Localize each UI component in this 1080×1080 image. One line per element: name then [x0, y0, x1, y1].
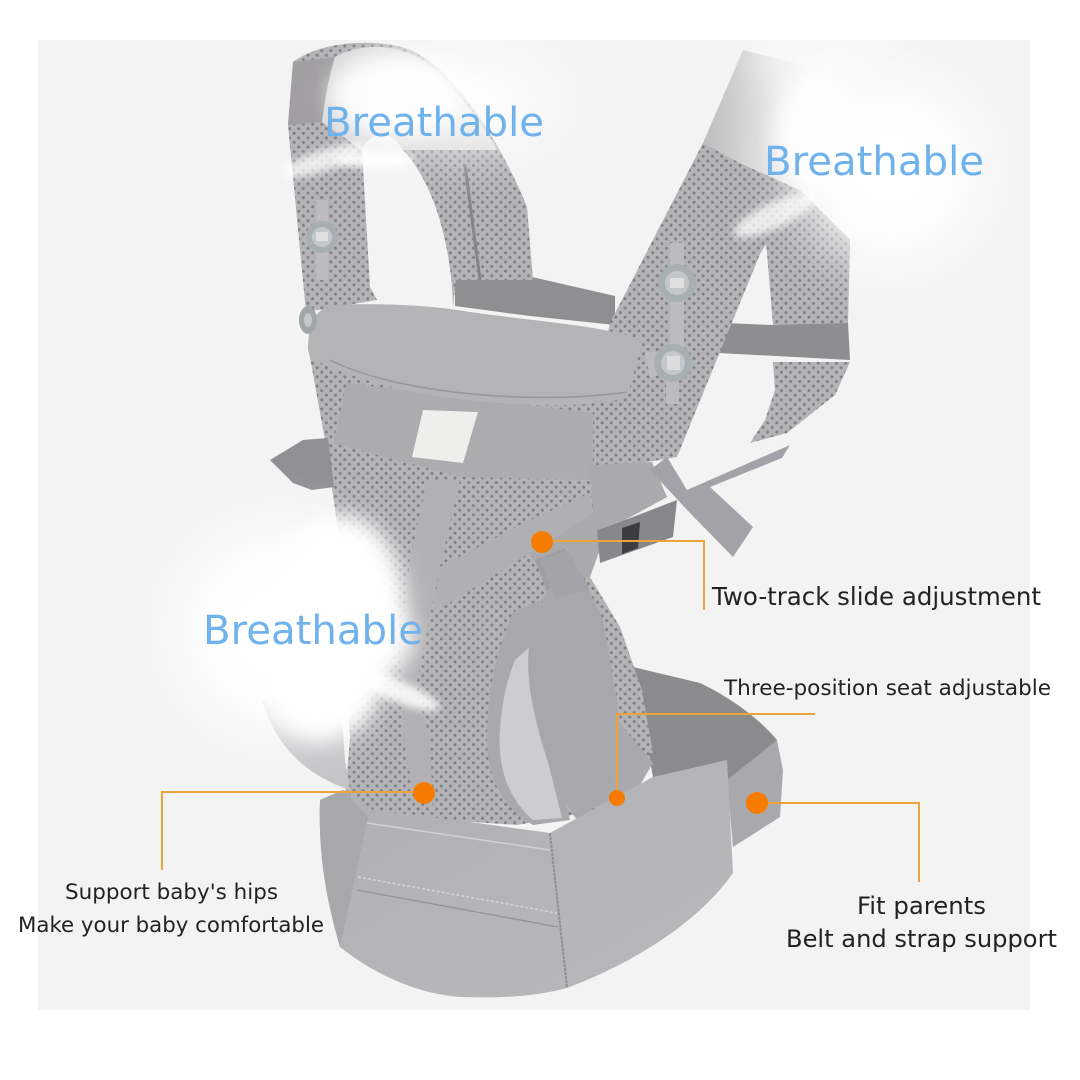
strap adjusters	[299, 200, 696, 404]
callout: two-track slide adjustment	[531, 531, 1041, 611]
breathable mist: lower left	[180, 515, 444, 740]
white label	[412, 410, 478, 463]
front waist belt	[320, 760, 733, 997]
seat bottom lump	[262, 690, 350, 790]
breathable mist: top left	[279, 53, 555, 184]
heading: Breathable top right: Breathable	[764, 139, 984, 185]
callout: support baby's hips: Make your baby comfortable	[18, 913, 324, 938]
breathable mist: top right	[729, 38, 980, 260]
lower seat panel	[600, 720, 653, 810]
callout: support baby's hips	[18, 782, 435, 938]
inner seat cushion	[487, 600, 570, 825]
diagonal strap	[433, 493, 593, 613]
heading: Breathable top left: Breathable	[324, 100, 544, 146]
back waist belt	[633, 667, 777, 785]
right main strap	[593, 50, 852, 470]
right outer strap and cross band	[700, 190, 850, 443]
buckle strap at pocket	[540, 550, 590, 598]
left shoulder strap	[288, 43, 533, 312]
left buckle	[270, 438, 334, 490]
folded hood pocket	[528, 572, 618, 820]
front panel under hood	[333, 383, 593, 480]
heading: Breathable lower left: Breathable	[203, 608, 423, 654]
callout: two-track slide adjustment: Two-track slide adjustment	[711, 582, 1041, 611]
waist belt strap	[727, 740, 783, 847]
callout: three-position seat adjustable: Three-position seat adjustable	[723, 676, 1051, 701]
callout: three-position seat adjustable	[609, 676, 1051, 806]
callout: fit parents: Belt and strap support	[786, 925, 1057, 953]
rear connector strap	[455, 277, 615, 325]
right buckle and webbing	[535, 445, 790, 592]
side mesh by pocket	[613, 627, 653, 753]
callout: fit parents: Fit parents	[857, 892, 986, 920]
hood edge line	[330, 360, 627, 397]
callout: support baby's hips: Support baby's hips	[65, 880, 278, 905]
callout: fit parents	[746, 792, 1057, 953]
vertical centre strap	[400, 480, 460, 810]
baby carrier illustration	[180, 38, 980, 997]
hood roll	[308, 304, 643, 405]
body mesh base	[309, 352, 667, 825]
side panel	[530, 462, 667, 580]
